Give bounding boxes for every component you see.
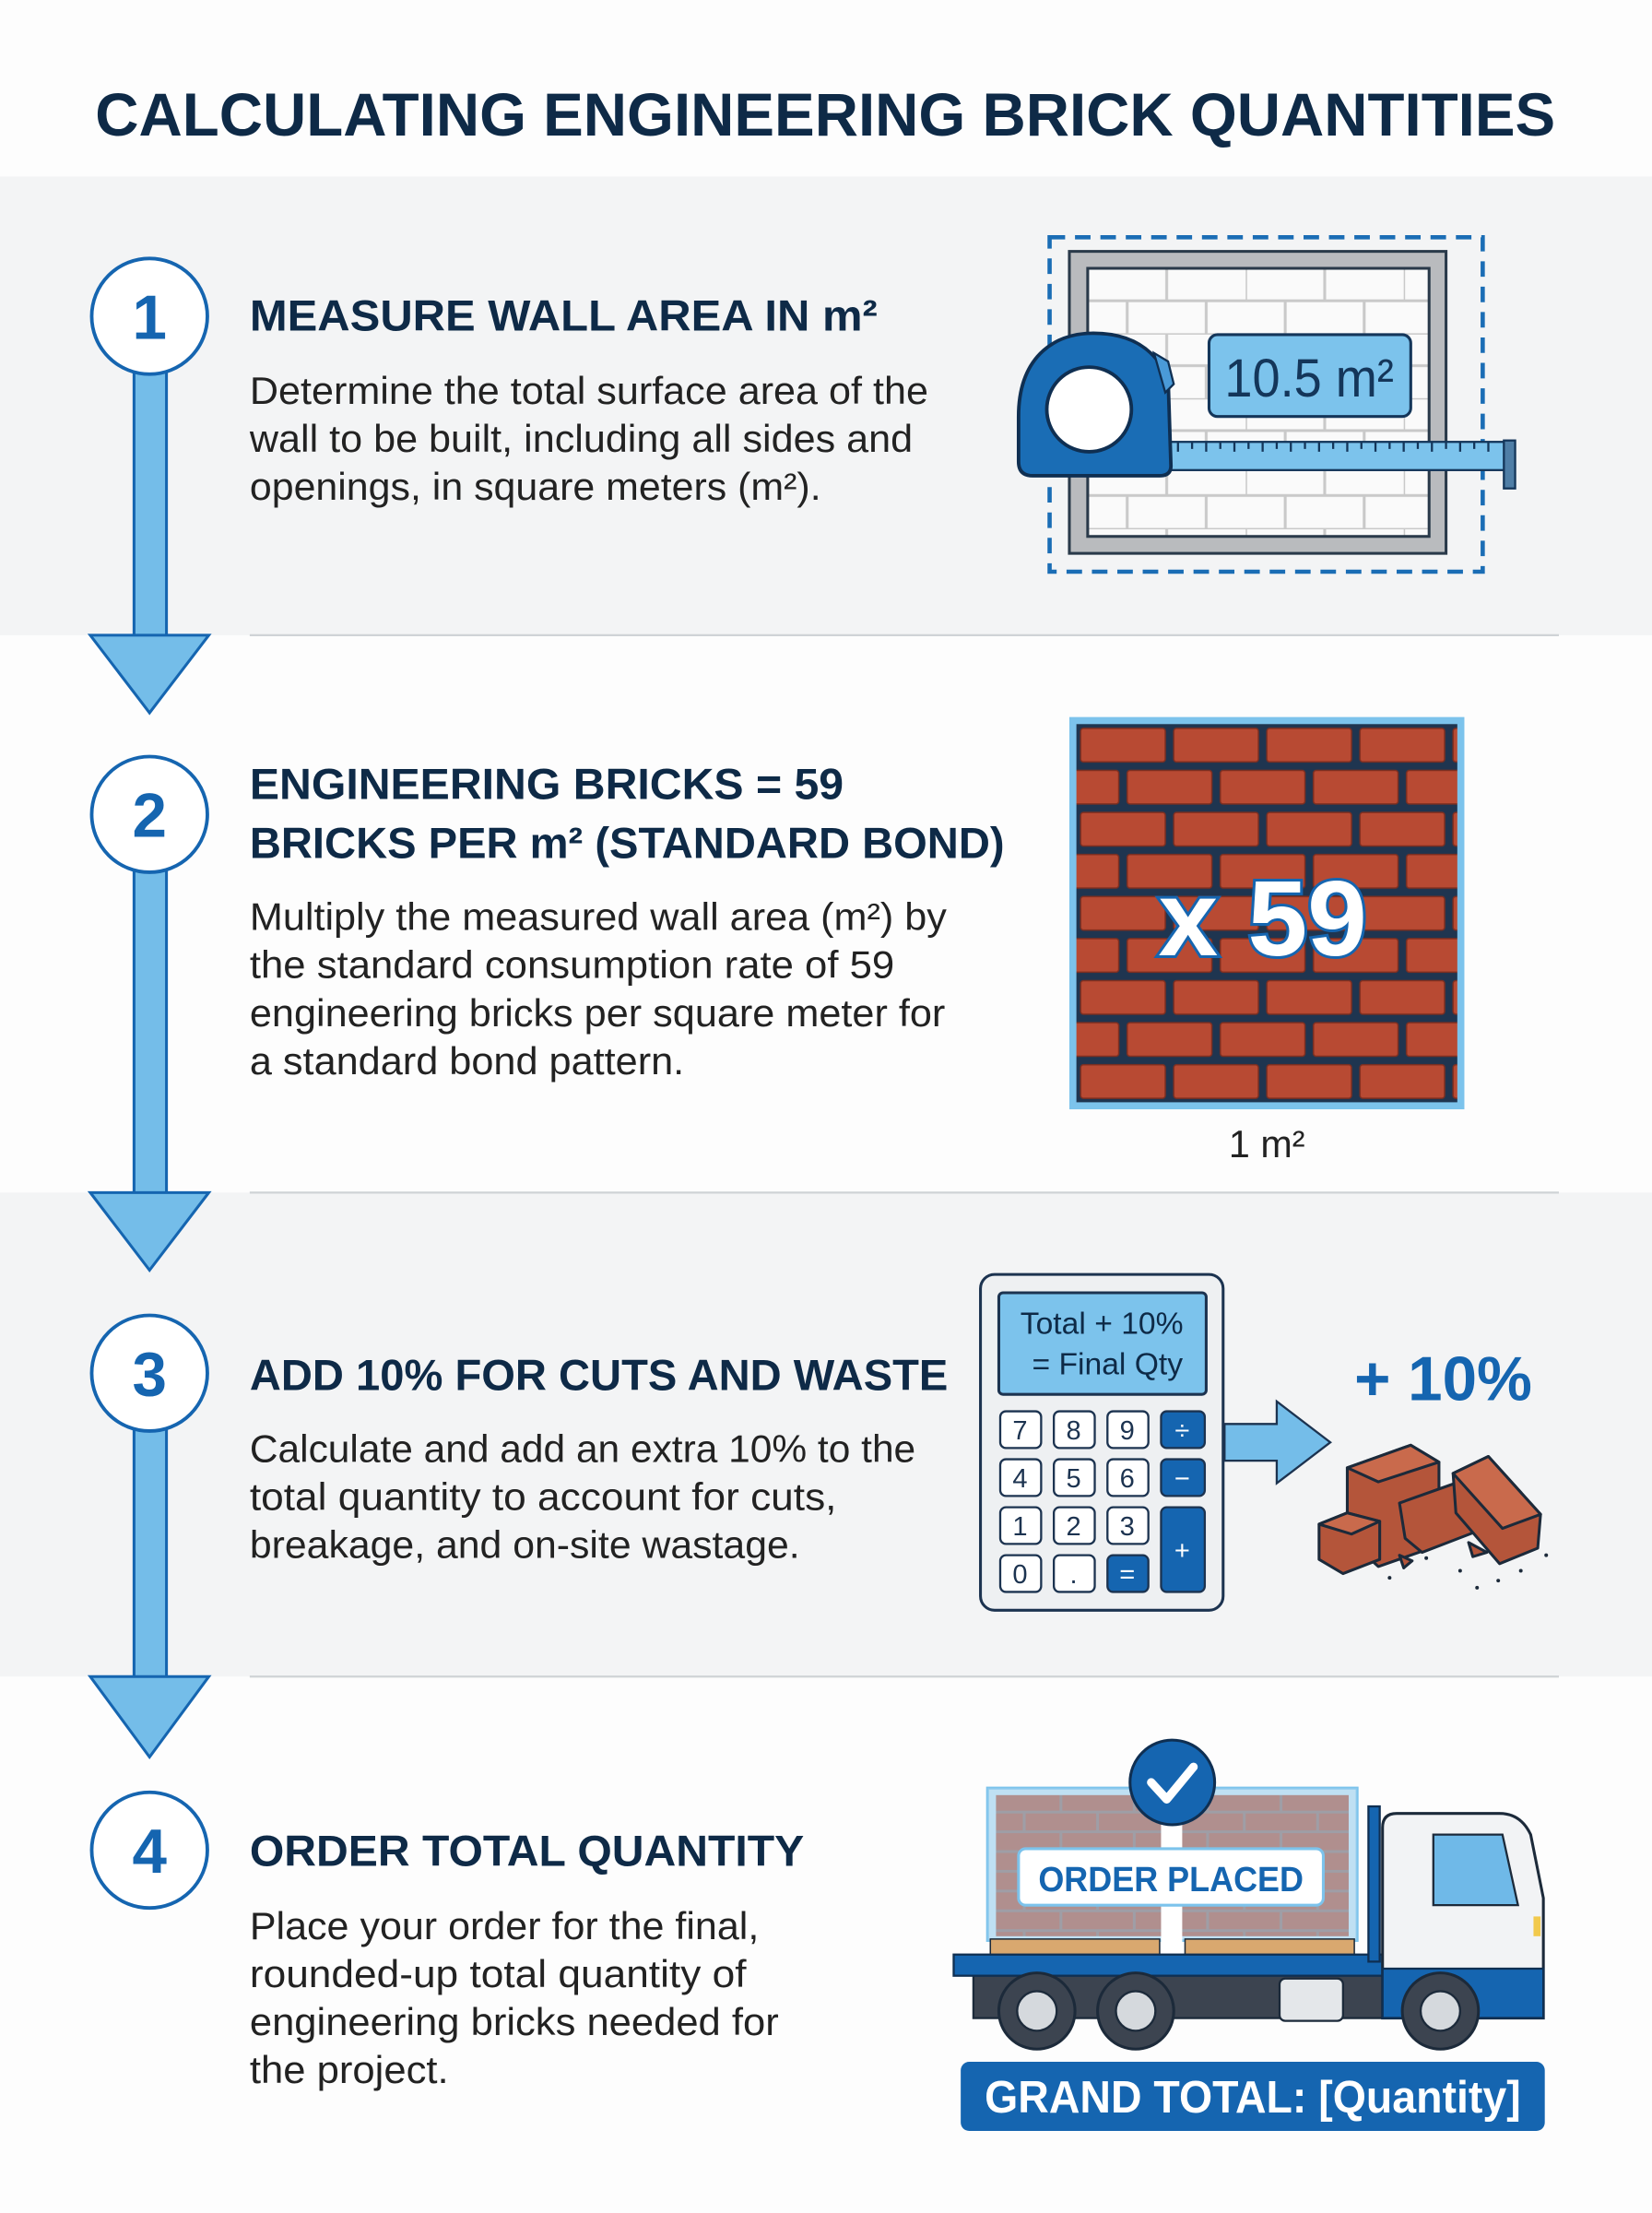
display: area reading bbox=[1209, 335, 1410, 417]
illustration: calculator: Total + 10% bbox=[1021, 1307, 1184, 1341]
order placed sign: ORDER PLACED bbox=[1038, 1860, 1304, 1899]
illustration: 1 m² brick panel x 59: 1 m² bbox=[1229, 1123, 1305, 1166]
step 4 text bbox=[250, 1827, 804, 2091]
wheels bbox=[998, 1973, 1479, 2049]
step 3 text: ADD 10% FOR CUTS AND WASTE bbox=[250, 1352, 948, 1401]
arrow: calculator to bricks bbox=[1224, 1402, 1330, 1484]
illustration: calculator bbox=[981, 1274, 1223, 1610]
step 2 text: a standard bond pattern. bbox=[250, 1040, 684, 1083]
illustration: calculator: 6 bbox=[1120, 1464, 1135, 1494]
illustration: calculator: ÷ bbox=[1174, 1416, 1189, 1446]
illustration: delivery truck bbox=[953, 1740, 1543, 2049]
step 4 text: the project. bbox=[250, 2049, 449, 2091]
illustration: calculator: 4 bbox=[1012, 1464, 1028, 1494]
illustration: calculator: 9 bbox=[1120, 1416, 1135, 1446]
step 1 text bbox=[249, 291, 928, 508]
illustration: calculator: 0 bbox=[1012, 1560, 1028, 1590]
label: +10%: + 10% bbox=[1354, 1344, 1532, 1414]
order placed sign bbox=[1019, 1849, 1323, 1905]
tape body bbox=[1019, 333, 1174, 476]
step 1 text: openings, in square meters (m²). bbox=[250, 466, 821, 508]
step 4 text: ORDER TOTAL QUANTITY bbox=[250, 1827, 804, 1876]
step 3 number circle bbox=[91, 1315, 207, 1431]
illustration: broken bricks bbox=[1319, 1445, 1540, 1574]
step 1 text: wall to be built, including all sides and bbox=[249, 418, 913, 460]
title: CALCULATING ENGINEERING BRICK QUANTITIES bbox=[95, 80, 1555, 148]
grand total banner: GRAND TOTAL: [Quantity] bbox=[985, 2073, 1521, 2123]
step 3 number circle: 3 bbox=[132, 1341, 167, 1410]
step 4 text: rounded-up total quantity of bbox=[250, 1953, 747, 1995]
step 1 number circle: 1 bbox=[132, 284, 167, 353]
step 2 text bbox=[250, 760, 1005, 1083]
illustration: calculator: . bbox=[1070, 1560, 1078, 1590]
check badge bbox=[1130, 1740, 1215, 1825]
step 2 text: Multiply the measured wall area (m²) by bbox=[250, 896, 947, 939]
illustration: calculator: − bbox=[1174, 1464, 1190, 1494]
step 3 text: total quantity to account for cuts, bbox=[250, 1476, 836, 1519]
illustration: calculator: 8 bbox=[1066, 1416, 1081, 1446]
illustration: 1 m² brick panel x 59: x 59 bbox=[1158, 858, 1367, 978]
illustration: calculator: = Final Qty bbox=[1032, 1348, 1183, 1382]
step 4 text: engineering bricks needed for bbox=[250, 2001, 779, 2043]
illustration: calculator: 2 bbox=[1066, 1512, 1081, 1542]
illustration: 1 m² brick panel x 59 bbox=[1069, 717, 1464, 1166]
step 4 number circle: 4 bbox=[132, 1817, 167, 1887]
step 2 text: BRICKS PER m² (STANDARD BOND) bbox=[250, 820, 1005, 869]
arrow: step 2 to 3 bbox=[90, 868, 208, 1271]
step 2 number circle: 2 bbox=[132, 782, 167, 851]
arrow: step 3 to 4 bbox=[90, 1426, 208, 1757]
grand total banner bbox=[961, 2062, 1545, 2131]
illustration: calculator: 5 bbox=[1066, 1464, 1081, 1494]
step 2 text: the standard consumption rate of 59 bbox=[250, 944, 894, 987]
step 4 text: Place your order for the final, bbox=[250, 1905, 759, 1947]
arrow: step 1 to 2 bbox=[90, 370, 208, 713]
step 3 text bbox=[250, 1352, 948, 1567]
step 3 text: breakage, and on-site wastage. bbox=[250, 1524, 800, 1567]
cab bbox=[1383, 1814, 1543, 2018]
illustration: calculator: 7 bbox=[1012, 1416, 1028, 1446]
step 1 text: MEASURE WALL AREA IN m² bbox=[250, 291, 878, 340]
step 4 number circle bbox=[91, 1793, 207, 1908]
step 1 text: Determine the total surface area of the bbox=[250, 370, 928, 412]
illustration: calculator: + bbox=[1174, 1536, 1190, 1566]
step 2 number circle bbox=[91, 756, 207, 872]
tape blade bbox=[1167, 441, 1516, 489]
illustration: calculator: = bbox=[1119, 1560, 1135, 1590]
step 3 text: Calculate and add an extra 10% to the bbox=[250, 1428, 915, 1471]
chassis and flatbed bbox=[953, 1806, 1538, 2021]
illustration: calculator: 1 bbox=[1012, 1512, 1028, 1542]
display: area reading: 10.5 m² bbox=[1224, 349, 1394, 408]
illustration: calculator: 3 bbox=[1120, 1512, 1135, 1542]
step 1 number circle bbox=[91, 258, 207, 374]
step 2 text: engineering bricks per square meter for bbox=[250, 992, 946, 1035]
illustration: wall with tape measure bbox=[1019, 237, 1516, 572]
cargo: bricks in wrap bbox=[987, 1788, 1357, 1956]
step 2 text: ENGINEERING BRICKS = 59 bbox=[250, 760, 844, 809]
